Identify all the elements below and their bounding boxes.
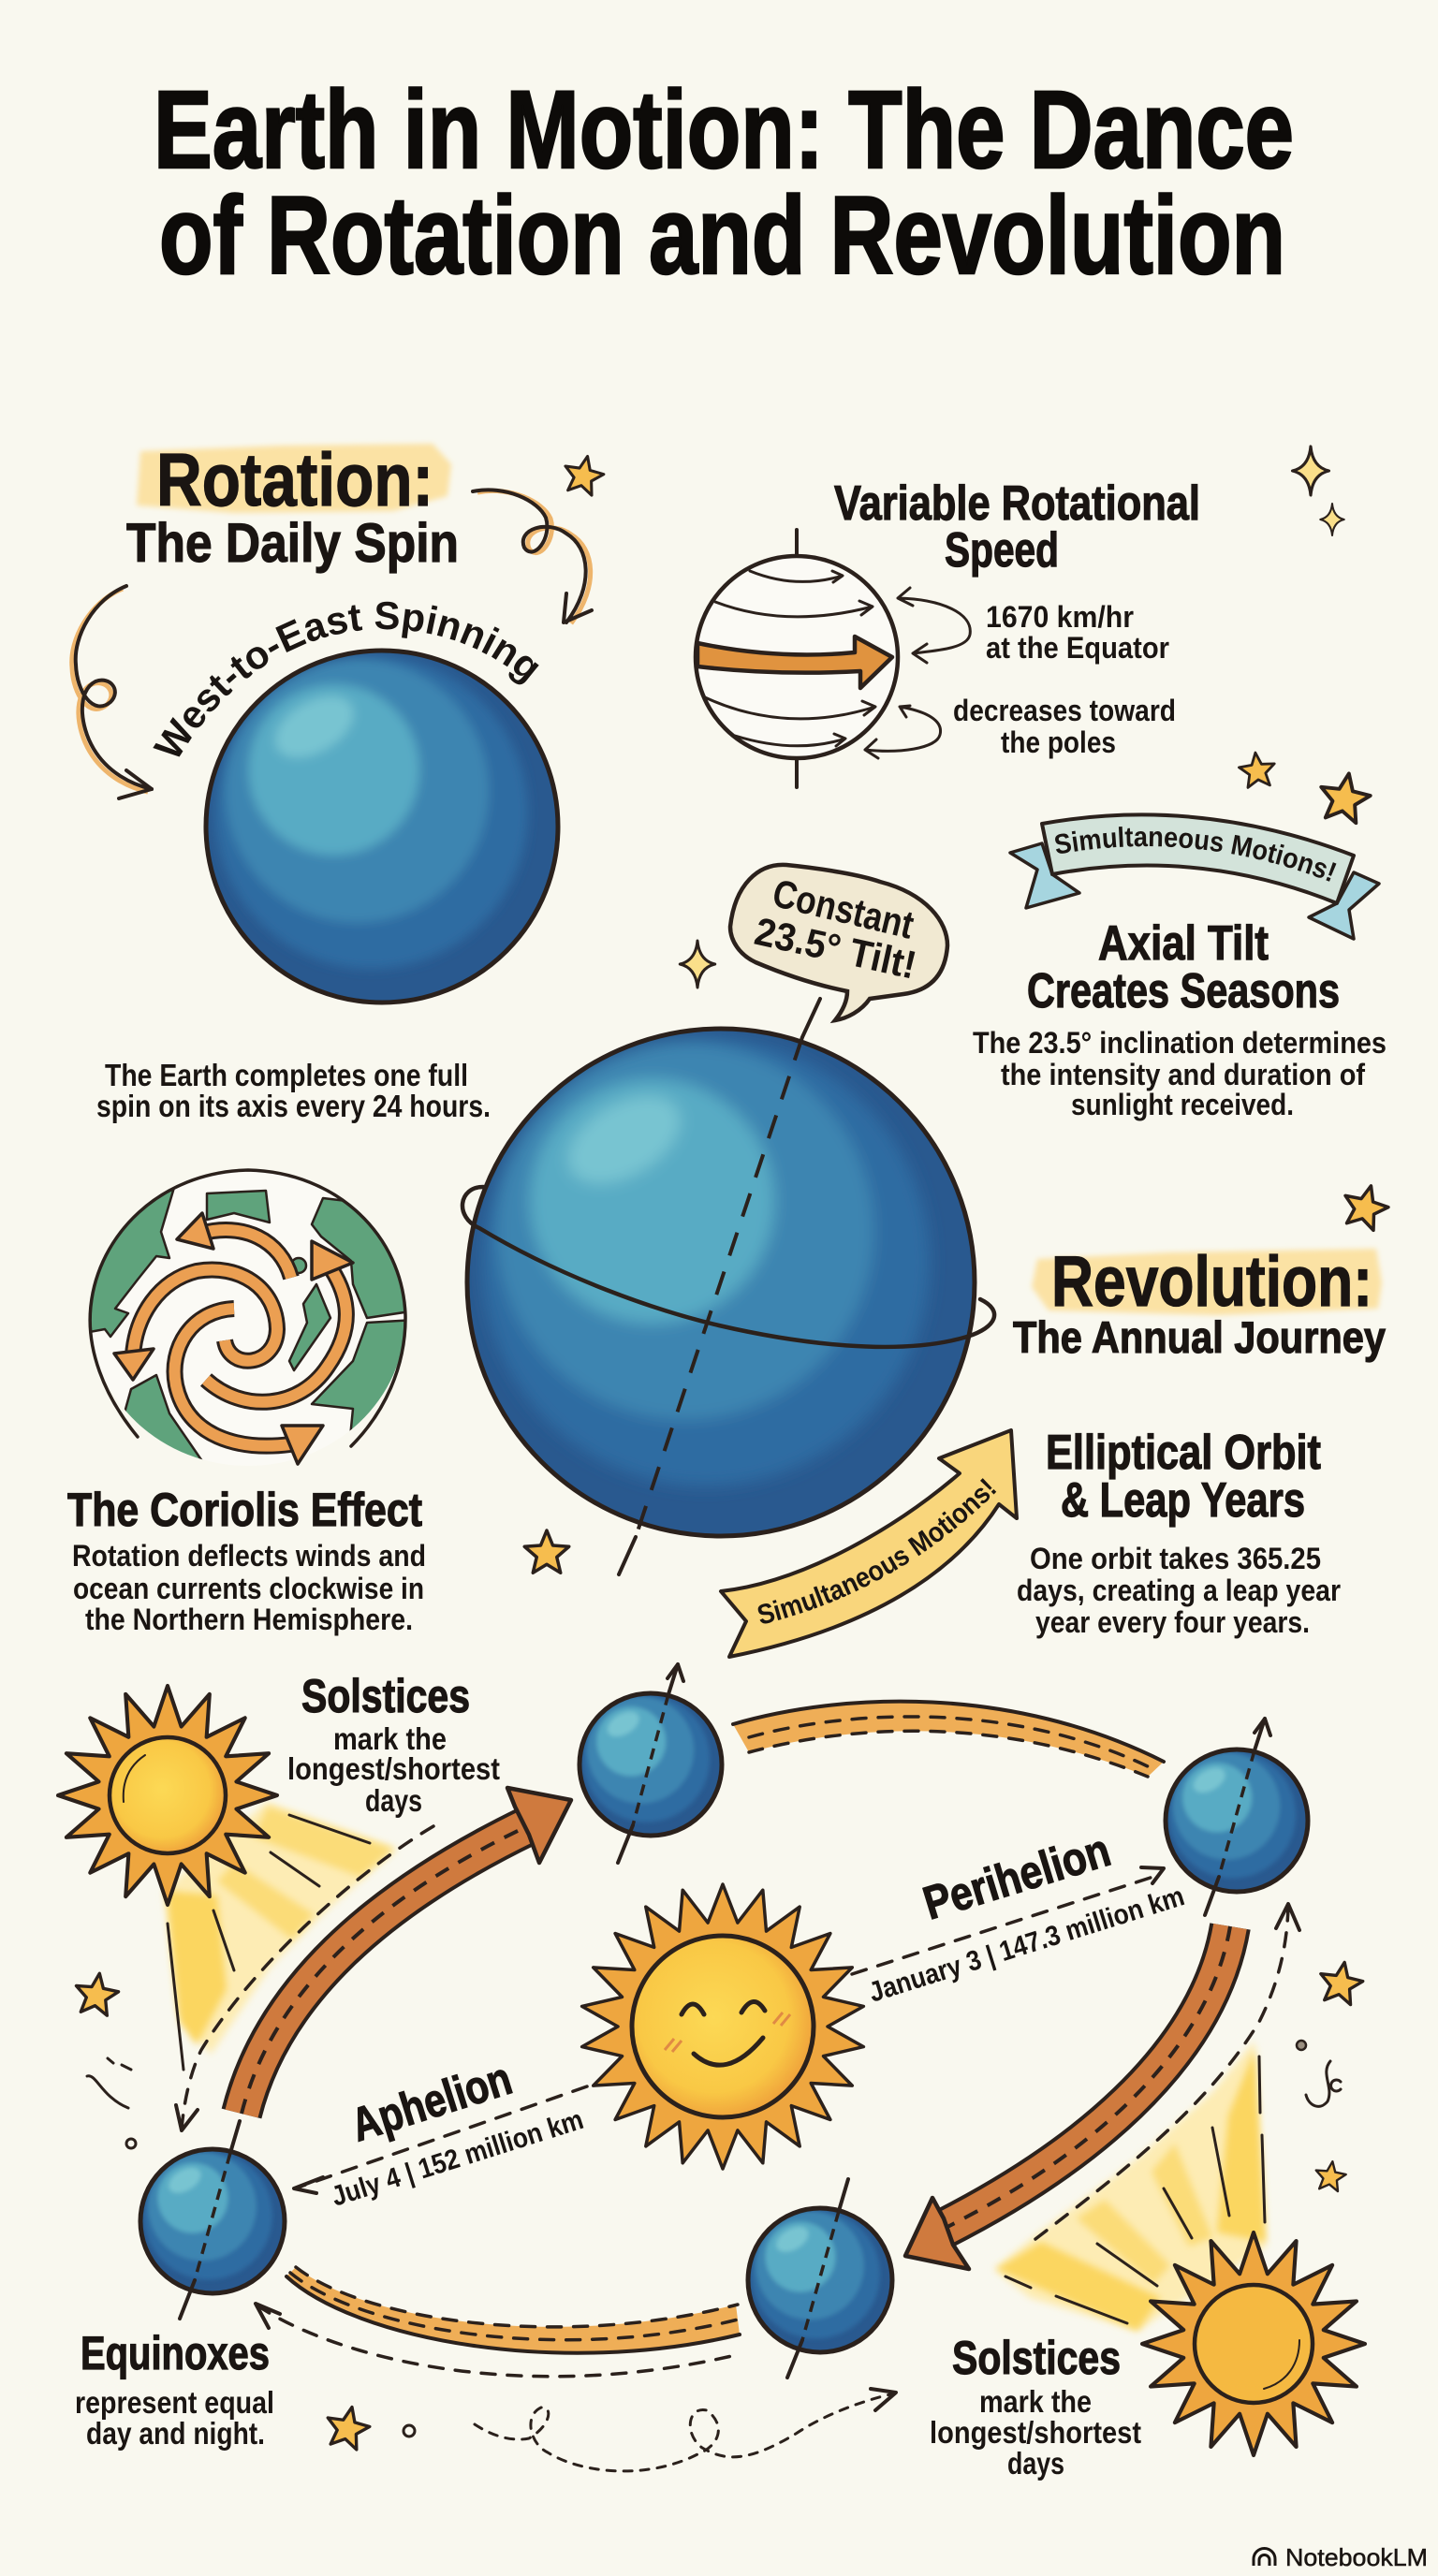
- doodle: left: [87, 2058, 136, 2148]
- heading: Variable Rotational Speed: [834, 476, 1200, 578]
- text: one full spin: [96, 1058, 491, 1123]
- star: [323, 2403, 373, 2452]
- heading: Rotation: Rotation:: [156, 438, 433, 521]
- heading: Elliptical Orbit: Elliptical Orbit: [1046, 1426, 1321, 1480]
- heading: Revolution: Revolution:: [1051, 1242, 1372, 1322]
- heading: Elliptical Orbit: [1046, 1426, 1321, 1528]
- heading: Axial Tilt: Axial Tilt: [1098, 916, 1269, 971]
- star: [73, 1970, 121, 2016]
- text: speed labels: 1670 km/hr: [986, 600, 1134, 634]
- label: Perihelion: Perihelion: [917, 1823, 1116, 1930]
- label: Aphelion: [294, 2052, 587, 2213]
- arrow ribbon: Simultaneous Motions: Simultaneous Motions!: [758, 1478, 996, 1623]
- text: speed labels: decreases toward: [953, 694, 1176, 727]
- text: coriolis: the Northern Hemisphere.: [85, 1603, 413, 1636]
- curved label: West-to-East Spinning: West-to-East Spinning: [153, 601, 539, 756]
- star: [1339, 1180, 1392, 1233]
- heading: Equinoxes: Equinoxes: [81, 2327, 270, 2379]
- text: speed labels: [953, 600, 1176, 759]
- text: speed labels: at the Equator: [986, 631, 1169, 665]
- heading: Solstices: Solstices: [952, 2332, 1121, 2384]
- orbit band: top: [733, 1702, 1164, 1777]
- arrow: dashed under bottom band: [256, 2304, 740, 2377]
- icon: earth right: [1165, 1719, 1309, 1915]
- sparkle: [1292, 446, 1329, 495]
- heading: Solstices: Solstices: [301, 1670, 470, 1722]
- ribbon: Simultaneous Motions: Simultaneous Motions!: [1055, 827, 1337, 882]
- arrow: dashed curly path: [475, 2389, 896, 2471]
- equator ring: [462, 1187, 994, 1347]
- solar beam: right: [994, 2041, 1266, 2331]
- icon: coriolis globe: [80, 1170, 417, 1479]
- arrow: upper speed loop: [898, 588, 970, 663]
- text: coriolis: Rotation deflects winds and: [72, 1539, 426, 1573]
- text: solstices: mark the: [333, 1721, 447, 1756]
- subheading: The Annual Journey: The Annual Journey: [1013, 1312, 1386, 1362]
- text: axial tilt: The 23.5° inclination determines: [973, 1026, 1387, 1060]
- text: elliptical orbit: year every four years.: [1035, 1605, 1310, 1639]
- equator arrow: [697, 637, 892, 688]
- arrow: lower speed loop: [865, 706, 941, 758]
- text: elliptical orbit: days, creating a leap year: [1017, 1573, 1341, 1607]
- text: solstices: [287, 1721, 500, 1818]
- arrow: orange orbit band to bottom earth: [905, 1926, 1230, 2269]
- text: solstices: longest/shortest: [930, 2415, 1141, 2450]
- text: equinoxes: day and night.: [86, 2416, 265, 2451]
- heading: Variable Rotational Speed: Speed: [945, 523, 1059, 578]
- doodle: right: [1297, 2041, 1341, 2106]
- text: solstices: longest/shortest: [287, 1751, 500, 1786]
- label: Aphelion: Aphelion: [345, 2052, 518, 2151]
- star: [524, 1530, 569, 1573]
- icon: earth top: [579, 1664, 723, 1863]
- arrow: dashed return to equinox: [176, 1826, 433, 2130]
- star: [1316, 769, 1373, 825]
- icon: earth bottom right: [747, 2179, 893, 2378]
- solar beam: left: [164, 1802, 398, 2070]
- heading: Elliptical Orbit: & Leap Years: [1061, 1473, 1305, 1528]
- heading: Axial Tilt: Creates Seasons: [1027, 964, 1340, 1018]
- panel: revolution heading: [1013, 1242, 1386, 1362]
- star: [1316, 1958, 1366, 2006]
- highlight: revolution: [1032, 1249, 1382, 1315]
- text: equinoxes: represent equal: [75, 2385, 274, 2420]
- text: solstices: [930, 2384, 1141, 2481]
- text: solstices: days: [365, 1783, 422, 1818]
- logo: NotebookLM: NotebookLM: [1285, 2543, 1428, 2571]
- text: speed labels: the poles: [1001, 725, 1116, 759]
- continents: [92, 1189, 404, 1460]
- text: solstices: days: [1007, 2446, 1064, 2481]
- star: [1313, 2159, 1347, 2192]
- star: [1238, 751, 1277, 788]
- swirl arrows: [200, 1230, 291, 1278]
- star: [561, 452, 607, 497]
- icon: left sun: [58, 1686, 277, 1905]
- heading: Variable Rotational Speed: Variable Rotational: [834, 476, 1200, 531]
- text: solstices: mark the: [979, 2384, 1092, 2419]
- title: [154, 68, 1294, 298]
- text: axial tilt: [973, 1026, 1387, 1121]
- icon: speed globe: [696, 530, 898, 787]
- icon: large tilted earth: [462, 999, 994, 1574]
- sparkle: [1320, 504, 1344, 535]
- subheading: The Daily Spin: The Daily Spin: [126, 513, 459, 574]
- sparkle: [680, 941, 715, 988]
- text: one full spin: spin on its axis every 24 hours.: [96, 1089, 491, 1123]
- text: coriolis: ocean currents clockwise in: [73, 1572, 424, 1605]
- text: one full spin: The Earth completes one full: [105, 1058, 468, 1092]
- arrow: orange orbit band to top earth: [242, 1788, 571, 2114]
- icon: rotating earth: [204, 649, 560, 1004]
- text: elliptical orbit: [1017, 1542, 1341, 1639]
- orbit band: bottom: [286, 2267, 740, 2353]
- arrow: dashed beside right band: [1035, 1904, 1299, 2239]
- label: Perihelion: January 3 | 147.3 million km: [865, 1881, 1188, 2009]
- heading: Axial Tilt: [1027, 916, 1340, 1018]
- panel: rotation heading: [126, 438, 459, 574]
- callout: constant tilt: Constant: [769, 871, 918, 947]
- label: Aphelion: July 4 | 152 million km: [328, 2104, 587, 2213]
- icon: earth bottom left: [139, 2121, 286, 2319]
- icon: right sun: [1142, 2232, 1365, 2455]
- text: coriolis: [72, 1539, 426, 1636]
- heading: The Coriolis Effect: The Coriolis Effect: [67, 1484, 422, 1536]
- text: axial tilt: sunlight received.: [1071, 1088, 1294, 1121]
- arrow ribbon: Simultaneous Motions: [719, 1428, 1019, 1659]
- icon: smiling sun: [582, 1884, 863, 2169]
- callout: constant tilt: [730, 865, 947, 1020]
- axis dashes: [636, 1037, 802, 1537]
- callout: constant tilt: 23.5° Tilt!: [751, 909, 920, 988]
- ribbon: Simultaneous Motions: [1008, 812, 1381, 941]
- text: equinoxes: [75, 2385, 274, 2451]
- doodle: bottom dot: [404, 2425, 415, 2437]
- arrow: left curl: [72, 586, 152, 798]
- arrow: right curl: [473, 490, 592, 623]
- text: axial tilt: the intensity and duration of: [1001, 1058, 1365, 1091]
- highlight: rotation: [137, 444, 451, 513]
- tilted axis: [619, 999, 820, 1574]
- text: elliptical orbit: One orbit takes 365.25: [1030, 1542, 1321, 1575]
- label: Perihelion: [852, 1823, 1188, 2009]
